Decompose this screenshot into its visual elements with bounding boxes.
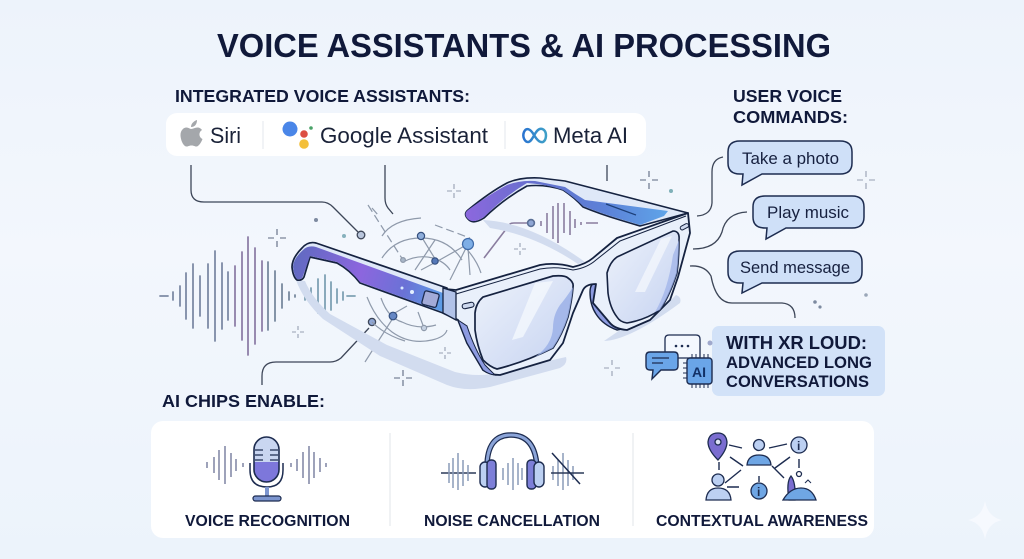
callout: XR Loud <box>712 326 885 396</box>
glasses illustration <box>292 178 690 389</box>
speech bubble: play music <box>753 196 864 239</box>
sparkles and dots <box>268 171 875 386</box>
icon: meta infinity <box>523 129 546 142</box>
icon: headphones <box>441 435 584 490</box>
speech bubble: send message <box>728 251 862 293</box>
icon: microphone <box>207 437 326 501</box>
callout: XR Loud: WITH XR LOUD: <box>726 333 867 353</box>
icon: contextual network <box>706 433 816 500</box>
heading: user voice commands <box>733 86 848 127</box>
speech bubble: send message: Send message <box>740 258 850 277</box>
left lens <box>475 276 573 369</box>
label: Meta AI: Meta AI <box>553 123 628 148</box>
icon: contextual network: i <box>797 439 800 453</box>
far temple <box>466 178 688 226</box>
callout: XR Loud: CONVERSATIONS <box>726 372 869 391</box>
hinge <box>443 223 689 320</box>
glasses shadow <box>296 220 680 389</box>
speech bubble: take a photo: Take a photo <box>742 149 839 168</box>
heading: AI chips enable: AI CHIPS ENABLE: <box>162 391 325 411</box>
nose pad <box>590 282 622 330</box>
label: Siri: Siri <box>210 123 241 148</box>
icon: google assistant <box>282 122 313 149</box>
panel: voice assistant logos <box>166 113 646 156</box>
network graphic behind glasses <box>365 205 481 362</box>
icon: apple logo <box>180 120 202 146</box>
label: contextual awareness: CONTEXTUAL AWARENESS <box>656 513 868 530</box>
label: noise cancellation: NOISE CANCELLATION <box>424 513 600 530</box>
speech bubble: take a photo <box>728 141 852 185</box>
label: Google Assistant: Google Assistant <box>320 123 488 148</box>
title: VOICE ASSISTANTS & AI PROCESSING <box>217 27 831 64</box>
panel: AI chip capabilities <box>151 421 874 538</box>
heading: user voice commands: USER VOICE <box>733 86 842 106</box>
callout: XR Loud: ADVANCED LONG <box>726 353 872 372</box>
near temple <box>292 243 447 313</box>
icon: contextual network: i <box>757 485 760 499</box>
soundwave: by far temple <box>484 203 598 258</box>
icon: corner sparkle <box>968 501 1002 539</box>
heading: user voice commands: COMMANDS: <box>733 107 848 127</box>
speech bubble: play music: Play music <box>767 203 849 222</box>
icon: chat and AI chip <box>646 335 712 388</box>
right lens <box>607 231 679 323</box>
soundwave: left <box>160 237 355 355</box>
heading: integrated voice assistants: INTEGRATED VOICE ASSISTANTS: <box>175 86 470 106</box>
connector lines: assistants to glasses <box>191 165 607 385</box>
label: voice recognition: VOICE RECOGNITION <box>185 513 350 530</box>
frame <box>443 213 690 375</box>
connector lines: commands <box>690 157 795 318</box>
icon: chat and AI chip: AI <box>692 364 706 380</box>
